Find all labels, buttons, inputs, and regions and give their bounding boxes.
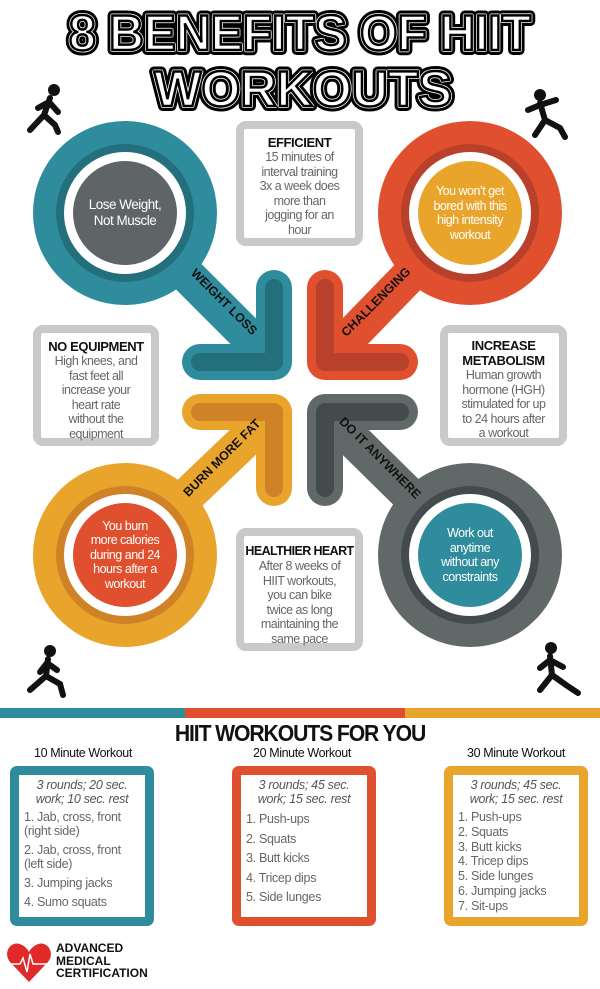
disc: burn calories: during and 24 — [90, 548, 160, 562]
ring: orange — [378, 121, 562, 305]
workout box: 20: 4. Tricep dips — [246, 870, 316, 884]
runner: top right — [528, 89, 565, 137]
workout title: 30: 30 Minute Workout — [467, 746, 565, 760]
disc: work out anytime: constraints — [443, 570, 497, 584]
disc: bored: workout — [450, 228, 490, 242]
box: healthier heart: After 8 weeks of — [259, 559, 340, 573]
label: do it anywhere: DO IT ANYWHERE — [336, 414, 424, 502]
workout box: 30: 3. Butt kicks — [458, 840, 521, 854]
disc: bored: bored with this — [433, 198, 507, 212]
box: efficient: hour — [288, 222, 311, 236]
label: burn more fat: BURN MORE FAT — [181, 416, 264, 499]
box: increase metabolism: METABOLISM — [462, 353, 545, 368]
title: WORKOUTS — [154, 61, 452, 117]
box: healthier heart: HEALTHIER HEART — [245, 544, 354, 558]
title: 8 BENEFITS OF HIIT — [69, 5, 531, 61]
box: healthier heart: you can bike — [267, 588, 332, 602]
workout box: 20: 2. Squats — [246, 832, 296, 846]
workout box: 20: 5. Side lunges — [246, 890, 321, 904]
box: healthier heart: twice as long — [267, 602, 332, 616]
workout box: 20: work; 15 sec. rest — [258, 792, 350, 806]
disc: bored: You won’t get — [436, 184, 504, 198]
workout box: 10: 3 rounds; 20 sec. — [37, 778, 127, 792]
workout box: 30: 6. Jumping jacks — [458, 884, 546, 898]
box: increase metabolism: stimulated for up — [462, 397, 545, 411]
disc: bored — [418, 161, 522, 265]
box: no equipment — [33, 325, 159, 446]
arrow: burn more fat — [200, 412, 274, 488]
arrow: weight loss — [200, 288, 274, 362]
box: no equipment: heart rate — [72, 398, 120, 412]
box: healthier heart: HIIT workouts, — [263, 574, 336, 588]
box: efficient: jogging for an — [265, 208, 334, 222]
ring: gray — [378, 463, 562, 647]
disc: work out anytime: anytime — [450, 540, 490, 554]
title: WORKOUTS — [154, 61, 452, 117]
box: no equipment: fast feet all — [69, 368, 123, 382]
disc: burn calories: You burn — [102, 519, 148, 533]
workout box: 20 — [232, 766, 376, 926]
box: efficient: 15 minutes of — [265, 150, 334, 164]
workout box: 30: 4. Tricep dips — [458, 854, 528, 868]
box: no equipment: equipment — [69, 426, 123, 440]
workout box: 10: (left side) 3. Jumping jacks 4. Sumo squats — [24, 857, 112, 909]
box: increase metabolism — [440, 325, 567, 446]
logo text: ADVANCED — [56, 941, 123, 955]
workout box: 10: 1. Jab, cross, front — [24, 810, 121, 824]
workout box: 30 — [444, 766, 588, 926]
box: increase metabolism: a workout — [479, 426, 528, 440]
color bar — [0, 708, 600, 718]
workout box: 20: 1. Push-ups — [246, 812, 309, 826]
logo text — [56, 941, 148, 980]
box: efficient: 3x a week does — [260, 179, 339, 193]
disc: work out anytime: Work out — [447, 526, 493, 540]
box: no equipment: NO EQUIPMENT — [48, 339, 144, 354]
runner: bottom right — [540, 642, 578, 693]
box: efficient: EFFICIENT — [268, 135, 331, 150]
workout box: 30: 1. Push-ups — [458, 810, 521, 824]
title: WORKOUTS — [154, 61, 452, 117]
runner: bottom left — [30, 645, 63, 695]
workout title: 10: 10 Minute Workout — [34, 746, 132, 760]
box: no equipment: increase your — [62, 383, 130, 397]
disc: lose weight — [73, 161, 177, 265]
box: increase metabolism: Human growth — [466, 368, 541, 382]
box: increase metabolism: hormone (HGH) — [462, 382, 545, 396]
disc: work out anytime — [418, 503, 522, 607]
box: healthier heart: same pace — [271, 632, 328, 646]
icon: heart — [7, 944, 51, 982]
box: efficient — [236, 121, 363, 246]
disc: burn calories: hours after a — [93, 562, 157, 576]
logo — [7, 941, 148, 982]
disc: burn calories: workout — [105, 577, 145, 591]
disc: work out anytime: without any — [441, 555, 499, 569]
label: challenging: CHALLENGING — [339, 265, 413, 339]
disc: burn calories — [73, 503, 177, 607]
workout box: 30: 7. Sit-ups — [458, 899, 508, 913]
workout box: 30: 3 rounds; 45 sec. — [471, 778, 561, 792]
workout box: 30: work; 15 sec. rest — [470, 792, 562, 806]
box: efficient: more than — [274, 194, 325, 208]
runners — [27, 84, 581, 698]
title: 8 BENEFITS OF HIIT — [69, 5, 531, 61]
box: efficient: interval training — [261, 164, 338, 178]
box: healthier heart: maintaining the — [261, 617, 338, 631]
workout box: 10 — [10, 766, 154, 926]
label: weight loss: WEIGHT LOSS — [188, 266, 260, 338]
arrow: do it anywhere — [325, 412, 400, 488]
disc: lose weight: Lose Weight, — [89, 197, 161, 212]
workout box: 10: (right side) 2. Jab, cross, front — [24, 824, 121, 857]
logo text: MEDICAL — [56, 954, 111, 968]
disc: lose weight: Not Muscle — [94, 213, 156, 228]
logo text: CERTIFICATION — [56, 966, 148, 980]
disc: burn calories: more calories — [91, 533, 159, 547]
box: increase metabolism: INCREASE — [472, 338, 535, 353]
diagram: arrows and rings — [33, 121, 562, 647]
workout box: 30: 2. Squats — [458, 825, 508, 839]
arrow: challenging — [325, 288, 400, 362]
ring: yellow — [33, 463, 217, 647]
workout title: 20: 20 Minute Workout — [253, 746, 351, 760]
workout box: 20: 3 rounds; 45 sec. — [259, 778, 349, 792]
workout box: 20: 3. Butt kicks — [246, 851, 309, 865]
workout box: 30: 5. Side lunges — [458, 869, 533, 883]
ring: blue — [33, 121, 217, 305]
title — [66, 5, 536, 117]
box: no equipment: without the — [69, 412, 123, 426]
disc: bored: high intensity — [437, 213, 503, 227]
heading: hiit workouts for you: HIIT WORKOUTS FOR YOU — [175, 720, 425, 746]
box: no equipment: High knees, and — [55, 354, 137, 368]
title: 8 BENEFITS OF HIIT — [69, 5, 531, 61]
box: healthier heart — [236, 528, 363, 651]
workout box: 10: work; 10 sec. rest — [36, 792, 128, 806]
runner: top left — [30, 84, 60, 132]
box: increase metabolism: to 24 hours after — [462, 412, 545, 426]
